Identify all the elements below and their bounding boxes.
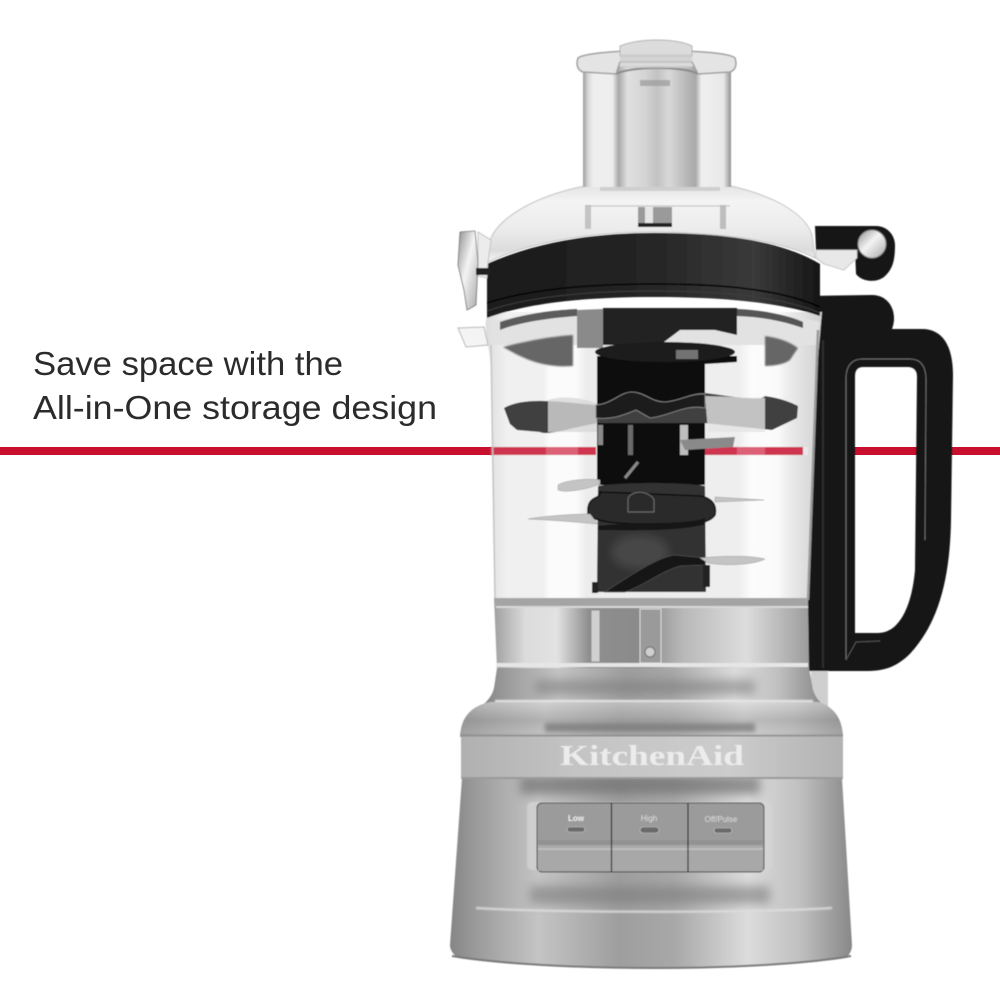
right lock knob <box>815 226 895 281</box>
button labels <box>568 814 738 824</box>
button labels: Off/Pulse <box>705 815 738 824</box>
lid dome <box>488 186 815 262</box>
base neck behind handle <box>811 668 828 706</box>
feed tube <box>577 40 736 187</box>
storage body <box>597 483 706 592</box>
logo band <box>461 736 843 778</box>
lid band <box>487 233 820 318</box>
lid latch <box>458 231 491 310</box>
bowl pour tab <box>458 327 488 347</box>
food processor <box>450 40 953 968</box>
bowl <box>458 308 822 600</box>
feed tube rim <box>577 50 736 74</box>
text: headline: Save space with the <box>33 345 343 382</box>
button labels: High <box>641 814 657 823</box>
spindle <box>588 342 737 593</box>
upper bowl reflection <box>490 308 820 366</box>
lower blades <box>528 479 765 565</box>
motor base <box>450 668 852 968</box>
red horizontal line <box>0 447 1000 455</box>
control panel <box>527 802 773 872</box>
handle <box>808 295 953 671</box>
lower body <box>450 778 852 968</box>
text: headline: All-in-One storage design <box>33 389 437 426</box>
upper blade <box>504 392 798 450</box>
bowl edges <box>491 345 495 600</box>
shading <box>520 776 770 904</box>
button indicator lights <box>567 827 732 833</box>
shoulder <box>460 702 843 737</box>
button labels: Low <box>568 814 585 823</box>
red line seen through bowl <box>490 447 596 455</box>
bowl base collar <box>494 598 809 668</box>
brand logo: KitchenAid <box>560 741 745 772</box>
neck <box>484 668 822 704</box>
text: headline <box>33 345 437 426</box>
